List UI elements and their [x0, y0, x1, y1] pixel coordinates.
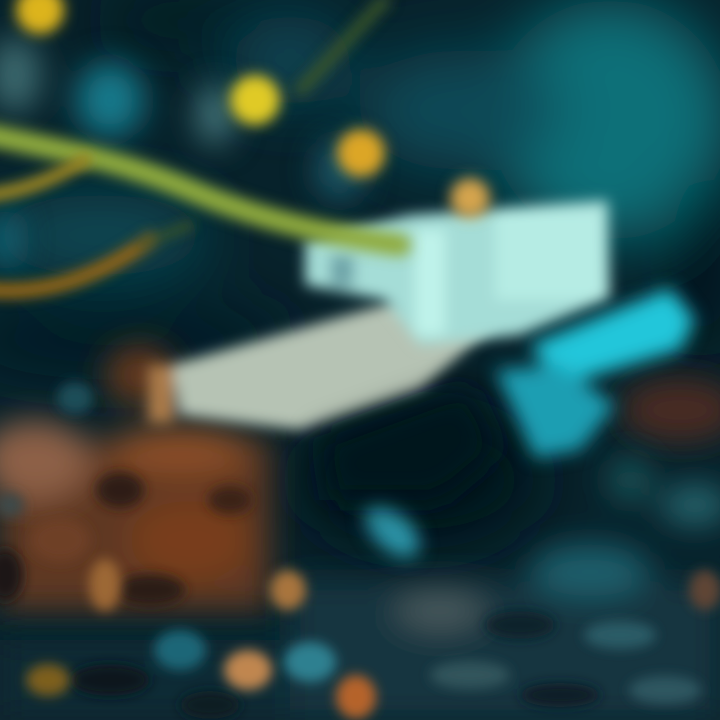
- panel: cream lower slab: [148, 300, 500, 430]
- icon: warm foreground bokeh: [26, 559, 720, 719]
- arrow: golden vines: [0, 160, 190, 291]
- panel: brown mottling: [0, 382, 252, 606]
- panel: rust brown mass: [0, 345, 720, 610]
- icon: teal leaf shapes: [0, 37, 364, 270]
- panel: dappled lower foreground: [0, 458, 720, 720]
- panel: dark machine shadow: [320, 385, 500, 500]
- arrow: green branch: [0, 0, 400, 245]
- icon: yellow lights: [16, 0, 490, 218]
- panel: pale cyan box: [305, 200, 610, 345]
- panel: dapple specks: [70, 611, 701, 719]
- background: teal glow: [0, 0, 720, 550]
- panel: cyan block: [355, 288, 695, 567]
